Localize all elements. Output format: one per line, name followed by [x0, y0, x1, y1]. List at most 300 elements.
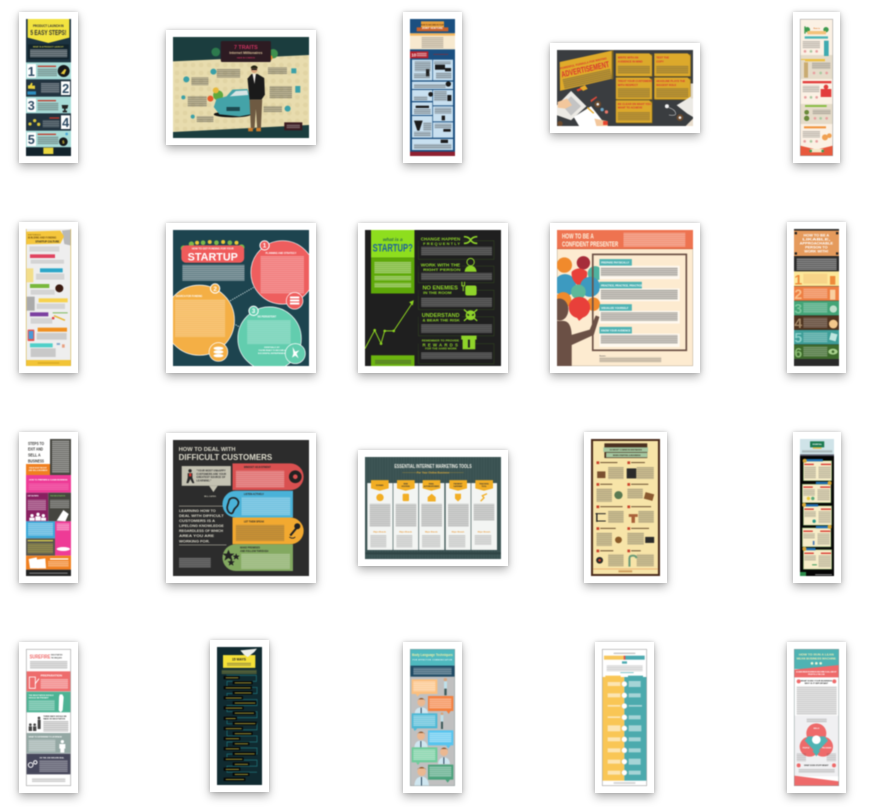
infographic: difficult customers [172, 439, 310, 577]
title plaque: 7 TRAITS [234, 45, 258, 51]
lead statement: AREA YOU ARE [179, 534, 215, 538]
title plaque: HAVE IN COMMON [237, 57, 255, 60]
credits [179, 558, 211, 568]
card: internet millionaires [166, 30, 316, 145]
header [794, 649, 839, 669]
footer [800, 572, 832, 576]
circle 3: persistent: EVENTUALLY, BY [264, 346, 280, 349]
list labels [224, 676, 257, 781]
title [394, 464, 472, 474]
intro [410, 666, 455, 677]
trait text blocks [188, 67, 292, 122]
circle 3: persistent: YOU'RE READY TO BECOME A [258, 349, 286, 352]
gray panel [26, 538, 55, 556]
tip icons [414, 65, 451, 143]
mistake headings [600, 462, 651, 551]
point 2: WORK WITH THE [421, 262, 460, 267]
checklist panel [410, 33, 455, 49]
footer [794, 776, 839, 786]
title tag and bird: 15 WAYS [232, 657, 247, 661]
card: advertisement formula [550, 43, 700, 133]
card: joint venture [403, 12, 462, 163]
point 4 [418, 310, 494, 336]
mistake markers [596, 461, 630, 552]
infographic: likable person [793, 228, 840, 367]
circle 1: planning: 1 [263, 243, 267, 250]
step 2: 2 [62, 82, 69, 96]
circle 1: planning: PLANNING AND STRATEGY [265, 252, 297, 255]
title: For Your Online Business [417, 470, 450, 474]
tip: be clear [616, 100, 653, 123]
maroon panel: GET BUYERS [28, 495, 39, 497]
column: tracking tool [471, 480, 497, 550]
headline banner [560, 50, 613, 91]
infographic: confident presenter [556, 229, 694, 367]
header: HOW TO RUN A LEAN [799, 653, 834, 657]
footer [26, 229, 71, 366]
section 1 [803, 36, 829, 56]
intro text [182, 265, 245, 281]
header: ESSENTIAL [813, 443, 822, 446]
definitions text [797, 686, 837, 715]
card: comparison [595, 642, 654, 793]
desk illustration right [665, 83, 693, 126]
tip: headline plays the biggest role: HEADLINE PLAYS THE [656, 79, 685, 83]
red band: A LEAN MEAN BUSINESS MACHINE IS ALL ABOUT [796, 670, 837, 673]
section: gears: ON THE JOB WIN-WIN DEAL [39, 756, 65, 759]
title: ESSENTIAL INTERNET MARKETING TOOLS [394, 464, 472, 470]
person 4 [414, 767, 429, 786]
panel 3 [802, 503, 832, 525]
section: question: THE NEGOTIATION SHOULD [29, 694, 54, 697]
section 2 [801, 59, 830, 78]
title banner: HOW TO BUILD A [28, 233, 41, 236]
infographic: exit and sell [25, 438, 72, 577]
card: difficult customers [166, 433, 316, 583]
column: domain [367, 480, 393, 550]
title: How to [813, 27, 821, 30]
point 3: IN THE ROOM [423, 291, 452, 295]
footer [614, 782, 635, 784]
title: EXIT AND [28, 447, 43, 452]
card: likable person [787, 222, 846, 373]
row 3: 3 [794, 301, 802, 317]
header [410, 649, 455, 666]
lead statement: DEAL WITH DIFFICULT [179, 514, 225, 518]
tip: treat your customers [616, 77, 653, 100]
tip: write with an audience: AUDIENCE IN MIND [618, 59, 643, 63]
row 4: 4 [794, 315, 802, 331]
column: email autoresponder: Major Brands [425, 532, 439, 534]
title panel: HOW TO BE A [803, 233, 829, 237]
column: web hosting [393, 480, 418, 550]
card: 15 ways [210, 640, 269, 792]
tip text [414, 61, 451, 149]
lead statement: LIFELONG KNOWLEDGE [179, 524, 224, 528]
mistake icons [595, 468, 654, 567]
section: question [26, 692, 71, 712]
yellow column labels [608, 682, 620, 775]
pink side panel [55, 521, 71, 556]
card: product launch [19, 12, 78, 163]
venn diagram: PROCESSES [822, 747, 831, 749]
row 6: 6 [794, 344, 802, 360]
title banner: BUILDING AND FUNDING [28, 236, 57, 240]
header: MEAN BUSINESS MACHINE [797, 657, 836, 661]
title panel: PERSON TO [805, 245, 828, 249]
column: tracking tool: TRACKING [479, 482, 489, 485]
infographic: lean mean business machine [793, 648, 840, 787]
title pill: STARTUP [188, 251, 238, 263]
closing heading: WHAT DOES STUFF MEAN? [804, 764, 829, 767]
row 2: 2 [794, 286, 802, 302]
intro column [50, 439, 71, 475]
point 5: REMEMBER TO PROVIDE [422, 338, 459, 342]
column: domain: Major Brands [373, 532, 387, 534]
tip: headline plays the biggest role [654, 77, 691, 100]
section 4 [804, 105, 831, 121]
point 2: RIGHT PERSON [423, 267, 461, 272]
quote bubble: CUSTOMERS ARE YOUR [196, 473, 226, 476]
bubble 4 [428, 730, 453, 748]
intro panel: WHAT IS A PRODUCT LAUNCH? [33, 46, 65, 49]
red banner: 10 [411, 52, 417, 57]
step 1 [30, 254, 64, 264]
card: body language [403, 642, 462, 793]
footer [410, 152, 455, 156]
column: payment gateway [446, 480, 471, 550]
point 5 [418, 336, 494, 364]
infographic: advertisement [556, 49, 694, 127]
circle 2: search: SEARCH FOR FUNDING [176, 295, 203, 298]
tip: treat your customers: WITH RESPECT [618, 83, 638, 87]
card: internet marketing tools [358, 450, 508, 566]
step 3: 3 [28, 99, 35, 113]
lead statement: REGARDLESS OF WHICH [179, 529, 224, 533]
row 1: 1 [794, 271, 802, 287]
title panel: WORK WITH! [804, 249, 828, 253]
center markers [622, 681, 627, 775]
orange footer panel [26, 556, 71, 570]
heading column [371, 230, 414, 293]
venn diagram: PEOPLE [803, 747, 810, 749]
panel 4 [802, 525, 832, 547]
card: exit and sell a business [19, 432, 78, 583]
title banner [28, 19, 69, 43]
panel: listen actively: LISTEN ACTIVELY [244, 493, 264, 496]
bubble 5 [412, 747, 437, 765]
title banner: PRODUCT LAUNCH IN [33, 24, 64, 28]
step 4 and barcode [27, 297, 68, 311]
point 1 [418, 236, 494, 259]
title: NEGOTIATION [51, 654, 63, 657]
headline banner: POWERFUL FORMULA FOR WRITING [560, 56, 608, 70]
lead statement: WORKING FOR. [179, 539, 210, 543]
point 5: FOR THE HARD WORK [425, 348, 457, 351]
section: prepare physically: PREPARE PHYSICALLY [601, 262, 630, 265]
title pill [181, 240, 245, 263]
panel 2 [802, 481, 832, 503]
headline banner: ADVERTISEMENT [560, 59, 611, 79]
title plaque [603, 443, 648, 458]
tip: treat your customers: TREAT YOUR CUSTOMERS [618, 79, 653, 83]
footer plaque [284, 122, 302, 130]
step 4: 4 [62, 116, 69, 130]
tip cells [412, 60, 453, 150]
title [417, 21, 448, 31]
title banner: STARTUP CULTURE [35, 239, 59, 243]
column: payment gateway: PAYMENT [454, 482, 463, 485]
connector lines [226, 675, 257, 772]
point 2 [418, 258, 494, 283]
tip: headline plays the biggest role: BIGGEST ROLE [656, 83, 677, 87]
orange panel [26, 464, 50, 475]
card: confident presenter [550, 223, 700, 373]
laptop corner [62, 230, 71, 246]
panel 1 [803, 459, 832, 481]
tip: write with an audience [616, 53, 653, 77]
card: negotiation techniques [19, 642, 78, 793]
column: tracking tool: Major Brands [478, 532, 491, 534]
sources: Sources: [599, 354, 606, 357]
presenter figure [551, 299, 599, 366]
header band: HOW TO BE A [562, 233, 594, 240]
column: email autoresponder: AUTORESPONDER [424, 485, 440, 488]
footer [32, 778, 65, 782]
footer badge [26, 147, 71, 156]
section: determinants: WHAT TO DETERMINE TO LEVERAGE [29, 736, 63, 739]
section 5 [803, 126, 832, 143]
bubble 6 [428, 765, 453, 783]
column: payment gateway: GATEWAY [454, 485, 463, 488]
title: HOW TO DEAL WITH [179, 447, 235, 453]
section: visualize: VISUALIZE YOURSELF [601, 307, 629, 310]
red band [794, 665, 839, 677]
speech bubbles [554, 256, 602, 321]
card: funding startup [166, 223, 316, 373]
card: lean mean business machine [787, 642, 846, 793]
circle 3: persistent: SUCCESSFUL ENTREPRENEUR [258, 353, 287, 355]
step 7 [30, 343, 65, 357]
column: web hosting: HOSTING [402, 486, 410, 488]
lead statement [179, 506, 226, 545]
man [248, 65, 265, 131]
circle 2: search: 2 [213, 286, 217, 293]
title panel: APPROACHABLE [800, 241, 833, 245]
infographic: black chalk layout [799, 438, 835, 577]
quote bubble [182, 466, 231, 498]
footer [593, 569, 658, 572]
infographic: startup culture [25, 228, 72, 367]
orange panel: AND SELL A BUSINESS [29, 469, 48, 472]
tip: be clear: WANT TO ACHIEVE [618, 106, 643, 110]
footer block [371, 355, 414, 366]
infographic: body language [409, 648, 456, 787]
quote bubble: GREATEST SOURCE OF [196, 476, 226, 479]
person 1 [415, 698, 428, 713]
orange panel: KNOW HOW THE EXIT [29, 467, 47, 469]
circle 3: persistent [238, 306, 305, 370]
title: SELL A [28, 453, 41, 458]
lead statement: CUSTOMERS IS A [179, 519, 216, 523]
section: audience [29, 715, 68, 732]
title plaque: 10 MOST COMMON MISTAKES [609, 449, 642, 452]
desk illustration left [557, 85, 608, 126]
yellow column [602, 676, 624, 781]
trait icons [181, 68, 300, 119]
header band [557, 230, 693, 249]
column: web hosting: Major Brands [399, 532, 413, 534]
heading column: STARTUP? [373, 242, 413, 254]
point 4: UNDERSTAND [422, 313, 460, 319]
infographic: joint venture [409, 18, 456, 157]
dark panel: THE NEGOTIATION [50, 494, 66, 497]
card: what is a startup [358, 223, 508, 373]
section: question: SHOULD BE PRESENT [29, 698, 49, 700]
infographic: 7 traits [172, 36, 310, 139]
tip: test the copy: COPY [656, 59, 664, 63]
bubble 3 [412, 712, 443, 731]
quote bubble: "YOUR MOST UNHAPPY [196, 469, 226, 472]
splashes [207, 48, 278, 102]
bubble 1 [412, 678, 447, 697]
footer [800, 146, 833, 156]
tip: write with an audience: WRITE WITH AN [618, 56, 638, 60]
person 2 [414, 732, 428, 747]
question heading: WHY IS IT IMPORTANT [805, 682, 829, 685]
title banner [26, 231, 64, 244]
infographic: mistakes [590, 438, 661, 577]
point 5: REWARDS [422, 342, 459, 347]
preparation: PREPARATION [41, 674, 62, 678]
tip: be clear: BE CLEAR ON WHAT YOU [618, 102, 651, 106]
pink panel: HOW TO PREPARE A CLEAN BUSINESS [29, 478, 68, 481]
card: instagram tips [793, 12, 840, 163]
step 5 and pencil [30, 312, 68, 324]
quote bubble: BILL GATES [204, 495, 217, 498]
column: email autoresponder [419, 480, 444, 550]
intro [797, 258, 837, 270]
blue panel [26, 521, 55, 538]
title [179, 447, 273, 462]
point 3 [418, 282, 494, 310]
section 3 [803, 81, 831, 99]
point 4: & BEAR THE RISK [422, 319, 460, 323]
step 2 and note [27, 268, 64, 282]
section: audience: THREE WAYS SHOULD BE [43, 715, 67, 718]
title plaque [221, 41, 271, 62]
panel: make promises: AND FOLLOW THROUGH [240, 550, 269, 553]
gray panel [794, 716, 839, 776]
column: domain: DOMAIN [376, 484, 384, 487]
frame [593, 254, 686, 350]
infographic: surefire negotiation [26, 648, 72, 786]
title: DIFFICULT CUSTOMERS [179, 453, 273, 462]
panel 5 [802, 547, 832, 569]
column: web hosting: WEB [404, 483, 408, 485]
question heading [797, 679, 836, 685]
section: audience: MADE ON NEGOTIATION [43, 718, 66, 721]
title [28, 441, 44, 463]
infographic: what is a startup [364, 229, 502, 367]
title pill: HOW TO GET FUNDING FOR YOUR [192, 248, 234, 251]
title plaque: WHEN STARTING A BUSINESS [613, 454, 641, 457]
person 3 [438, 748, 450, 764]
title: BUSINESS [28, 458, 44, 463]
heading column: what is a [383, 237, 403, 242]
infographic: comparison columns [602, 648, 648, 786]
quote bubble: LEARNING." [196, 479, 212, 482]
title: JOINT VENTURE [422, 26, 443, 30]
point 1: FREQUENTLY [423, 241, 461, 246]
panel: let them speak: LET THEM SPEAK [244, 521, 264, 524]
card: startup culture [19, 222, 78, 373]
column: payment gateway: Major Brands [452, 532, 465, 534]
card: common mistakes [584, 432, 667, 583]
section: know your audience: KNOW YOUR AUDIENCE [601, 330, 631, 333]
title: SUREFIRE [30, 654, 50, 660]
credits [26, 570, 71, 576]
title: TECHNIQUES [51, 657, 63, 659]
title [30, 654, 67, 669]
tip: test the copy [654, 53, 691, 77]
teal column [624, 676, 647, 781]
step 3 and coffee [30, 284, 63, 295]
title: HOW TO SUCCEED IN YOUR [421, 24, 444, 26]
infographic: tall cream guide [800, 18, 834, 156]
mistake text [596, 467, 654, 566]
title: STEPS TO [28, 441, 44, 446]
car [214, 89, 251, 117]
teal column labels [629, 681, 642, 775]
header: FOR EFFECTIVE COMMUNICATION [413, 658, 453, 661]
header band: CONFIDENT PRESENTER [562, 241, 618, 248]
header [604, 653, 645, 673]
step 5 [26, 131, 71, 147]
circle 3: persistent: BE PERSISTENT [258, 317, 277, 319]
question heading: WHAT DOES YOUR BUSINESS [801, 679, 833, 682]
step 5: $ [62, 139, 65, 144]
row 5: 5 [794, 330, 802, 346]
infographic: marketing tools [364, 456, 502, 560]
circle 1: planning [251, 241, 314, 309]
circle 3: persistent: 3 [252, 308, 256, 315]
title panel [794, 231, 839, 256]
tip: test the copy: TEST THE [656, 56, 669, 60]
card: essential checklist [793, 432, 841, 583]
panel: make promises [222, 544, 293, 571]
column: email autoresponder: EMAIL [429, 482, 434, 485]
title panel: LIKABLE, [802, 237, 830, 241]
step 5: 5 [28, 133, 35, 147]
list text [226, 677, 255, 780]
circle 2: search [164, 284, 234, 361]
venn diagram: SKILLS [813, 728, 820, 730]
infographic: funding for your startup [172, 229, 310, 367]
connectors [230, 287, 254, 327]
infographic: product launch [25, 18, 72, 157]
lead statement: LEARNING HOW TO [179, 509, 216, 513]
section: practice: PRACTICE, PRACTICE, PRACTICE [601, 284, 643, 287]
growth line chart [365, 300, 414, 349]
step 1: 1 [28, 65, 35, 79]
title plaque: Internet Millionaires [229, 51, 262, 55]
bubble 2 [428, 696, 453, 714]
step 6 and phone [28, 328, 67, 341]
point 1: CHANGE HAPPEN [421, 236, 460, 241]
venn diagram [797, 718, 836, 761]
infographic: dark teal list [216, 646, 263, 786]
